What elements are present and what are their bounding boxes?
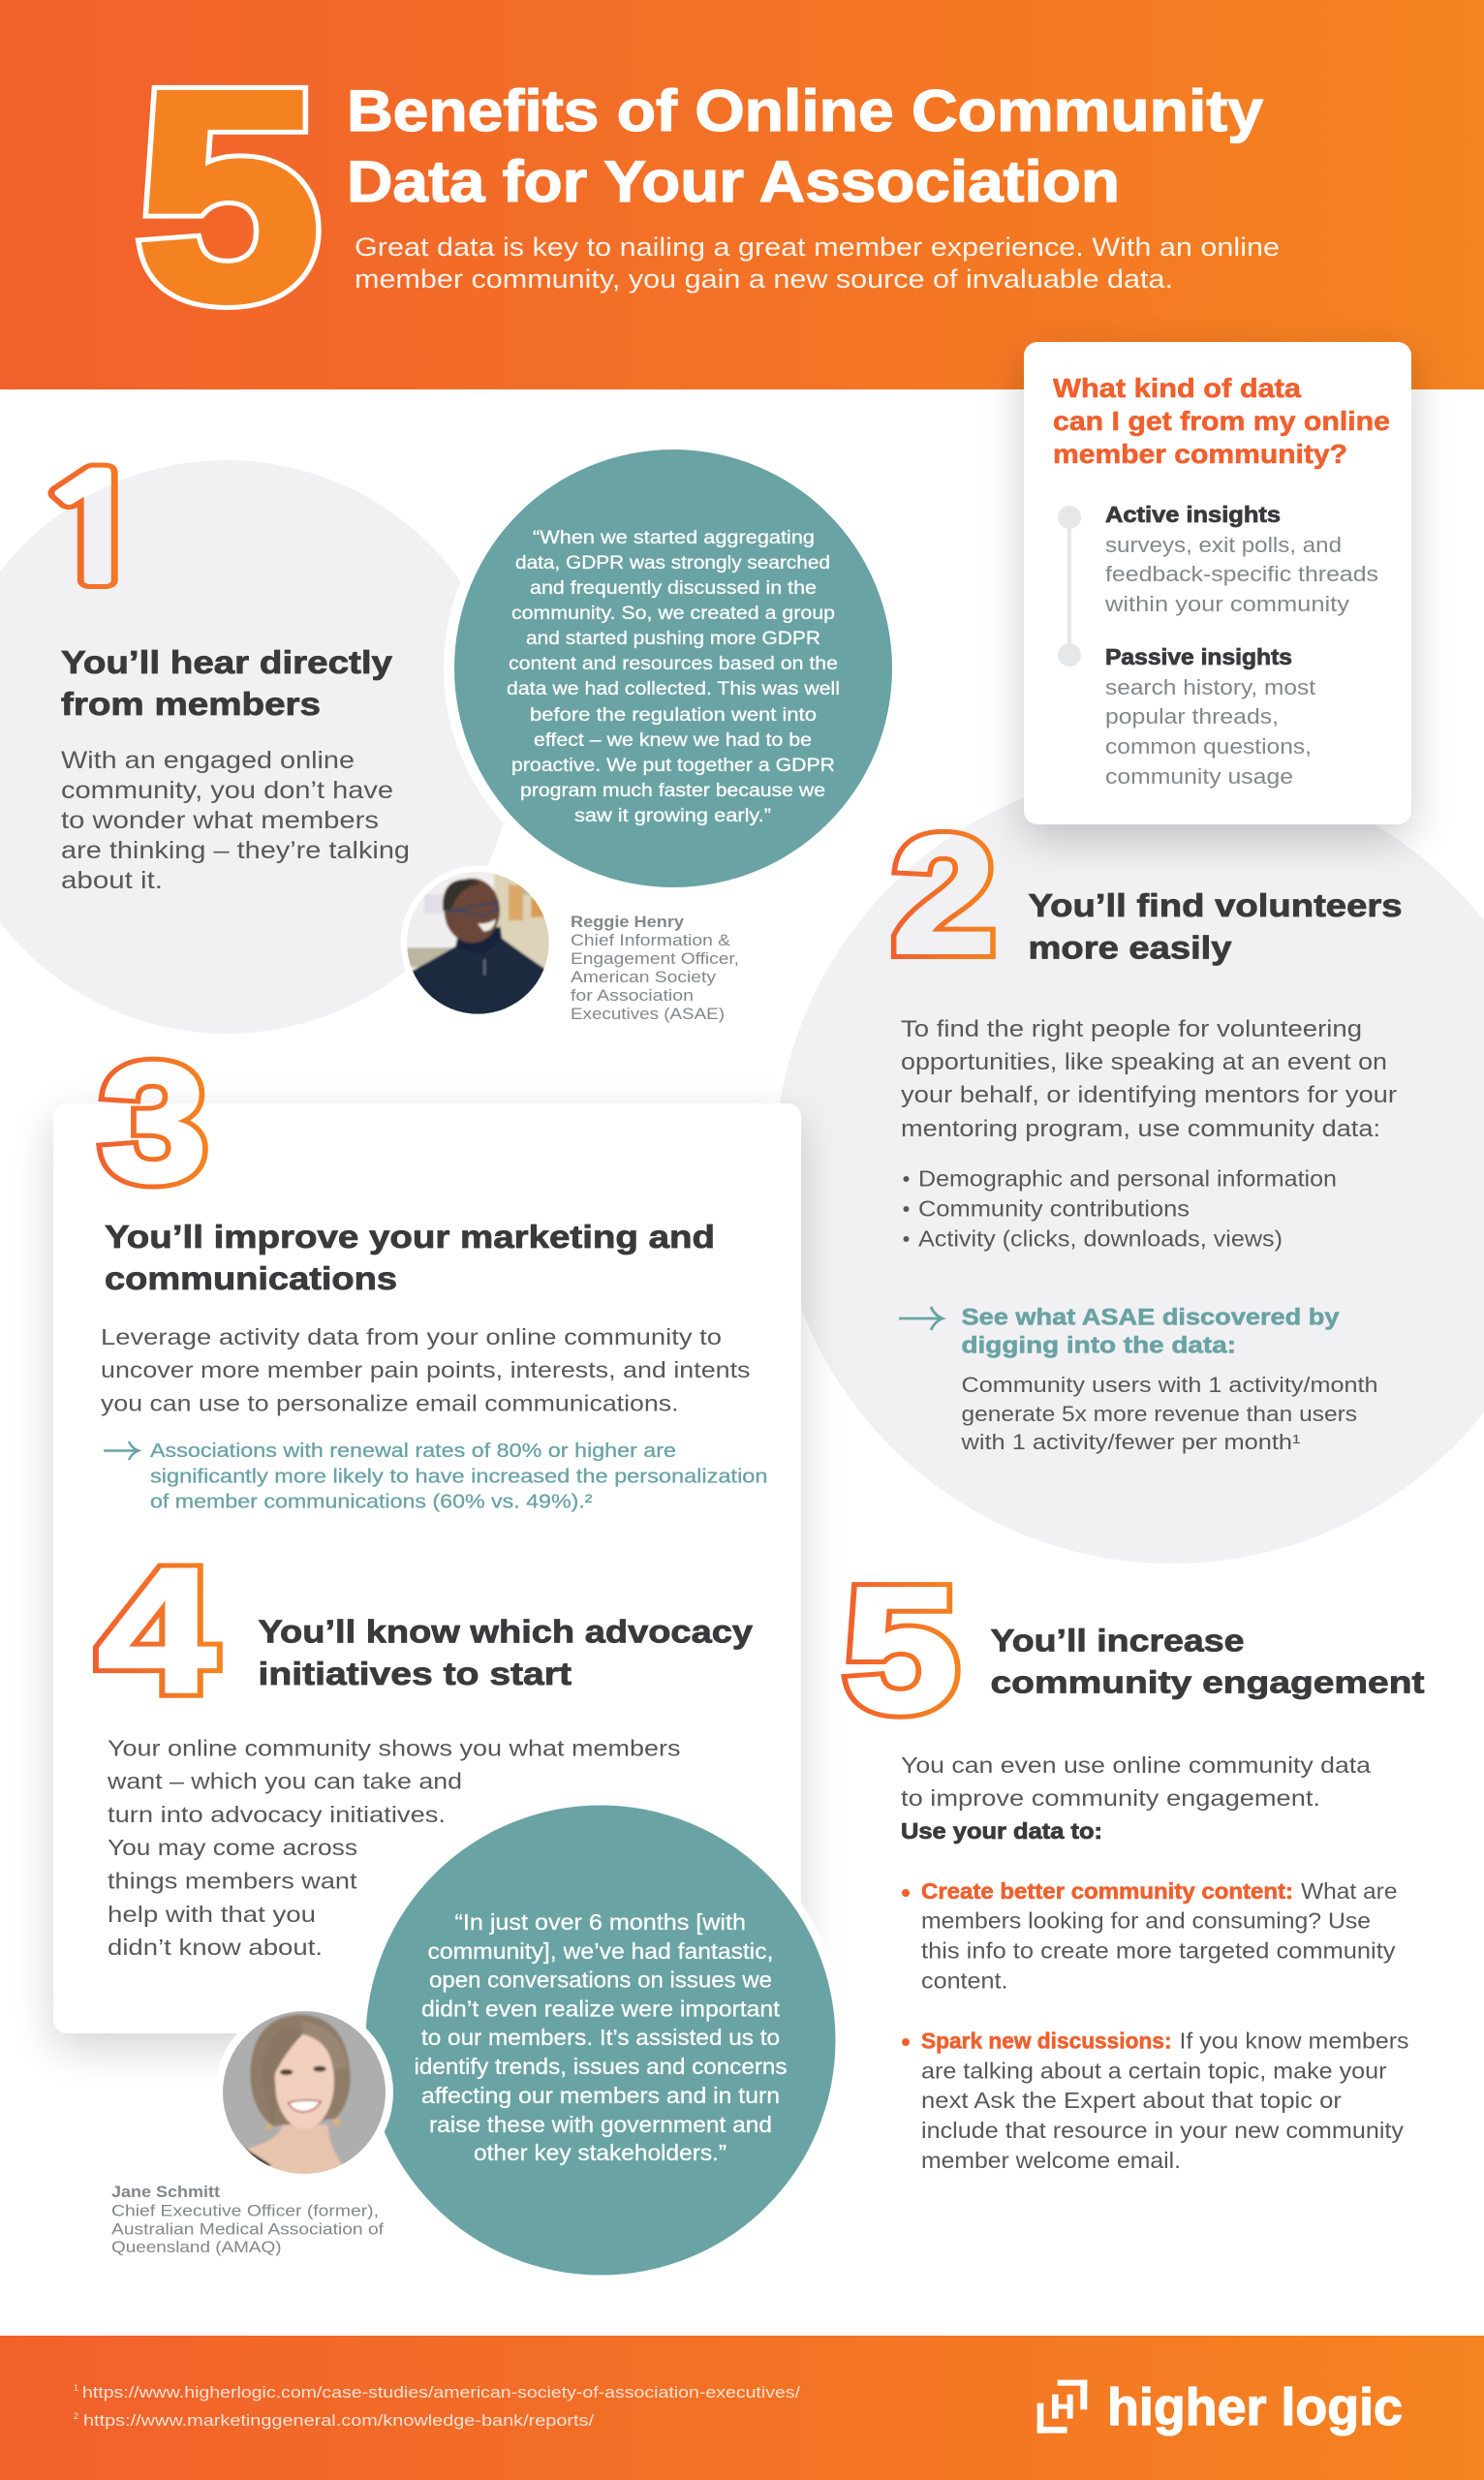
section 2 heading: You’ll find volunteers: [1029, 887, 1403, 923]
callout: ASAE: [960, 1304, 1377, 1454]
quote circle: Jane Schmitt: identify trends, issues and concerns: [415, 2054, 787, 2079]
section 4 body: want – which you can take and: [107, 1769, 462, 1794]
panel heading: What kind of data: [1053, 373, 1301, 403]
active insights: Active insights: [1105, 502, 1281, 527]
bullet: create better community content: this info to create more targeted community: [921, 1938, 1396, 1963]
footnotes: https://www.higherlogic.com/case-studies/american-society-of-association-executives/: [82, 2384, 800, 2402]
panel heading: can I get from my online: [1053, 406, 1390, 436]
number 2: 2: [892, 802, 996, 988]
section 5 intro: to improve community engagement.: [901, 1785, 1320, 1811]
footnotes: 2: [74, 2411, 78, 2421]
bullet: create better community content: members looking for and consuming? Use: [921, 1908, 1371, 1934]
bullet: create better community content: content.: [921, 1968, 1007, 1994]
section 2 body: To find the right people for volunteering: [901, 1016, 1362, 1042]
attribution: Reggie Henry: Chief Information &: [571, 932, 730, 949]
quote circle: Jane Schmitt: didn’t even realize were important: [421, 1996, 781, 2021]
section 2 body: opportunities, like speaking at an event on: [901, 1049, 1387, 1075]
quote circle: Jane Schmitt: affecting our members and in turn: [421, 2083, 780, 2108]
bullet: create better community content: Create better community content:: [921, 1878, 1293, 1904]
section 4 body: didn’t know about.: [108, 1935, 323, 1960]
big number 5: 5: [138, 32, 320, 360]
passive insights: [1105, 644, 1316, 789]
section 2 list: Community contributions: [918, 1195, 1190, 1221]
section 4 body: turn into advocacy initiatives.: [108, 1802, 446, 1827]
quote circle: Jane Schmitt: “In just over 6 months [with: [455, 1909, 746, 1935]
header band: [0, 0, 1484, 389]
quote circle: Jane Schmitt: open conversations on issues we: [429, 1967, 772, 1992]
section 2 body: [901, 1016, 1397, 1142]
section 5 heading: [990, 1624, 1425, 1699]
photo: Reggie Henry: [401, 866, 549, 1014]
quote circle: Reggie Henry: effect – we knew we had to be: [534, 729, 812, 751]
section 2 list: Activity (clicks, downloads, views): [918, 1226, 1283, 1252]
quote circle: Reggie Henry: content and resources based on the: [509, 653, 838, 674]
section 2 body: mentoring program, use community data:: [901, 1116, 1380, 1142]
section 1 heading: [61, 644, 393, 722]
callout: renewal rates: of member communications (60% vs. 49%).²: [150, 1490, 593, 1513]
section 2 heading: more easily: [1029, 930, 1232, 965]
number 1: 1: [31, 457, 155, 604]
section 4 body: You may come across: [108, 1835, 357, 1860]
attribution: Reggie Henry: Reggie Henry: [571, 914, 685, 931]
arrow: [899, 1307, 943, 1330]
section 5 intro: [901, 1752, 1372, 1844]
callout: ASAE: digging into the data:: [961, 1333, 1236, 1358]
quote circle: Reggie Henry: and started pushing more GDPR: [526, 628, 820, 649]
section 4 body: Your online community shows you what members: [108, 1736, 680, 1761]
quote circle: Jane Schmitt: [357, 1797, 844, 2283]
subtitle: [355, 232, 1280, 294]
section 5 intro: Use your data to:: [901, 1818, 1102, 1844]
section 3 body: uncover more member pain points, interests, and intents: [101, 1357, 750, 1382]
bullet: spark new discussions: next Ask the Expert about that topic or: [921, 2088, 1342, 2113]
timeline: [1058, 506, 1081, 666]
quote circle: Reggie Henry: community. So, we created a group: [511, 603, 835, 624]
attribution: Jane Schmitt: [111, 2184, 384, 2256]
section 1 heading: You’ll hear directly: [61, 644, 393, 680]
quote circle: Jane Schmitt: to our members. It’s assisted us to: [421, 2025, 780, 2050]
attribution: Reggie Henry: Executives (ASAE): [571, 1006, 725, 1023]
callout: renewal rates: significantly more likely to have increased the personalization: [150, 1465, 767, 1488]
background circle: section 2: [775, 769, 1484, 1564]
section 2: [892, 802, 1403, 1454]
bullet: create better community content: [902, 1878, 1397, 1994]
bullet: create better community content: What are: [1301, 1878, 1397, 1904]
attribution: Reggie Henry: for Association: [571, 987, 694, 1005]
title: [347, 78, 1264, 214]
attribution: Jane Schmitt: Queensland (AMAQ): [111, 2239, 281, 2256]
panel heading: [1053, 373, 1390, 469]
section 1 body: are thinking – they’re talking: [61, 837, 410, 864]
attribution: Jane Schmitt: Australian Medical Association of: [111, 2220, 384, 2238]
quote circle: Reggie Henry: and frequently discussed in the: [530, 577, 817, 599]
passive insights: common questions,: [1105, 734, 1312, 759]
section 1 heading: from members: [61, 686, 321, 722]
section 4 body: [107, 1736, 680, 1960]
bullet: spark new discussions: include that resource in your new community: [921, 2118, 1405, 2143]
section 3 heading: You’ll improve your marketing and: [105, 1219, 715, 1255]
passive insights: search history, most: [1105, 675, 1316, 699]
big number 5: 5: [138, 32, 320, 360]
bullet: spark new discussions: member welcome email.: [921, 2148, 1181, 2173]
passive insights: community usage: [1105, 764, 1293, 789]
section 4 heading: [258, 1614, 754, 1691]
logo icon: [1037, 2380, 1087, 2434]
footnotes: 1: [74, 2383, 78, 2393]
section 3 heading: communications: [105, 1260, 397, 1296]
bullet: spark new discussions: are talking about a certain topic, make your: [921, 2058, 1387, 2083]
bullet: spark new discussions: [902, 2029, 1408, 2173]
attribution: Reggie Henry: Engagement Officer,: [571, 950, 739, 968]
passive insights: Passive insights: [1105, 644, 1292, 669]
attribution: Jane Schmitt: Chief Executive Officer (former),: [111, 2203, 379, 2220]
attribution: Jane Schmitt: Jane Schmitt: [111, 2184, 221, 2201]
quote circle: Jane Schmitt: community], we’ve had fantastic,: [428, 1938, 773, 1964]
active insights: surveys, exit polls, and: [1105, 533, 1342, 557]
callout: ASAE: See what ASAE discovered by: [961, 1304, 1340, 1331]
logo wordmark: higher logic: [1107, 2378, 1403, 2436]
title: Data for Your Association: [347, 149, 1120, 214]
section 5: [844, 1550, 1425, 2173]
section 1 body: With an engaged online: [61, 747, 355, 774]
active insights: within your community: [1104, 592, 1350, 616]
section 2 list: [903, 1166, 1337, 1252]
section 1 body: [61, 747, 410, 894]
section 4 body: help with that you: [108, 1902, 316, 1927]
quote circle: Reggie Henry: [444, 439, 903, 898]
section 4 heading: You’ll know which advocacy: [258, 1614, 754, 1649]
quote circle: Reggie Henry: proactive. We put together a GDPR: [511, 755, 835, 776]
section 2 body: your behalf, or identifying mentors for your: [901, 1082, 1397, 1108]
section 1: [31, 439, 903, 1027]
callout: renewal rates: Associations with renewal rates of 80% or higher are: [150, 1440, 676, 1462]
panel: sections 3 and 4: [53, 1029, 801, 2048]
quote circle: Reggie Henry: data we had collected. This was well: [507, 678, 840, 699]
section 3 body: you can use to personalize email communications.: [101, 1391, 678, 1416]
number 4: 4: [98, 1532, 216, 1729]
callout: renewal rates: [150, 1440, 767, 1513]
footer band: [0, 2336, 1484, 2480]
number 5: 5: [844, 1550, 959, 1749]
quote circle: Reggie Henry: data, GDPR was strongly searched: [515, 552, 830, 574]
section 1 body: community, you don’t have: [61, 777, 393, 804]
section 3 body: Leverage activity data from your online community to: [101, 1324, 722, 1349]
quote circle: Reggie Henry: before the regulation went into: [530, 704, 817, 726]
footnotes: [74, 2383, 800, 2430]
section 5 heading: You’ll increase: [990, 1624, 1244, 1658]
arrow: [104, 1442, 139, 1460]
section 2 list: Demographic and personal information: [918, 1166, 1337, 1192]
section 1 body: about it.: [61, 867, 163, 894]
quote circle: Reggie Henry: saw it growing early.”: [574, 805, 771, 826]
quote circle: Reggie Henry: “When we started aggregating: [533, 527, 815, 548]
subtitle: Great data is key to nailing a great member experience. With an online: [355, 232, 1280, 262]
attribution: Reggie Henry: American Society: [571, 969, 717, 986]
callout: ASAE: Community users with 1 activity/month: [961, 1373, 1377, 1397]
quote circle: Jane Schmitt: other key stakeholders.”: [474, 2140, 727, 2165]
subtitle: member community, you gain a new source of invaluable data.: [355, 264, 1173, 294]
number 3: 3: [100, 1029, 207, 1217]
bullet: spark new discussions: If you know members: [1180, 2029, 1408, 2054]
active insights: feedback-specific threads: [1105, 562, 1378, 586]
panel: what kind of data: [1024, 342, 1411, 839]
section 3 body: [101, 1324, 750, 1416]
passive insights: popular threads,: [1105, 704, 1279, 728]
attribution: Reggie Henry: [571, 914, 739, 1023]
photo: Jane Schmitt: [220, 2011, 393, 2174]
callout: ASAE: with 1 activity/fewer per month¹: [960, 1430, 1300, 1454]
active insights: [1104, 502, 1378, 616]
bullet: spark new discussions: Spark new discussions:: [921, 2029, 1172, 2054]
section 3 heading: [105, 1219, 715, 1296]
section 5 heading: community engagement: [990, 1664, 1425, 1699]
section 5 intro: You can even use online community data: [901, 1752, 1372, 1778]
callout: ASAE: generate 5x more revenue than users: [961, 1402, 1357, 1426]
section 4 heading: initiatives to start: [258, 1656, 572, 1691]
title: Benefits of Online Community: [347, 78, 1264, 143]
quote circle: Jane Schmitt: raise these with government and: [429, 2112, 772, 2137]
footnotes: https://www.marketinggeneral.com/knowledge-bank/reports/: [83, 2412, 594, 2430]
section 2 heading: [1029, 887, 1403, 965]
quote circle: Reggie Henry: program much faster because we: [520, 780, 825, 801]
section 1 body: to wonder what members: [61, 807, 379, 834]
background circle: section 1: [0, 460, 513, 1034]
section 4 body: things members want: [108, 1868, 357, 1893]
panel heading: member community?: [1053, 439, 1347, 469]
